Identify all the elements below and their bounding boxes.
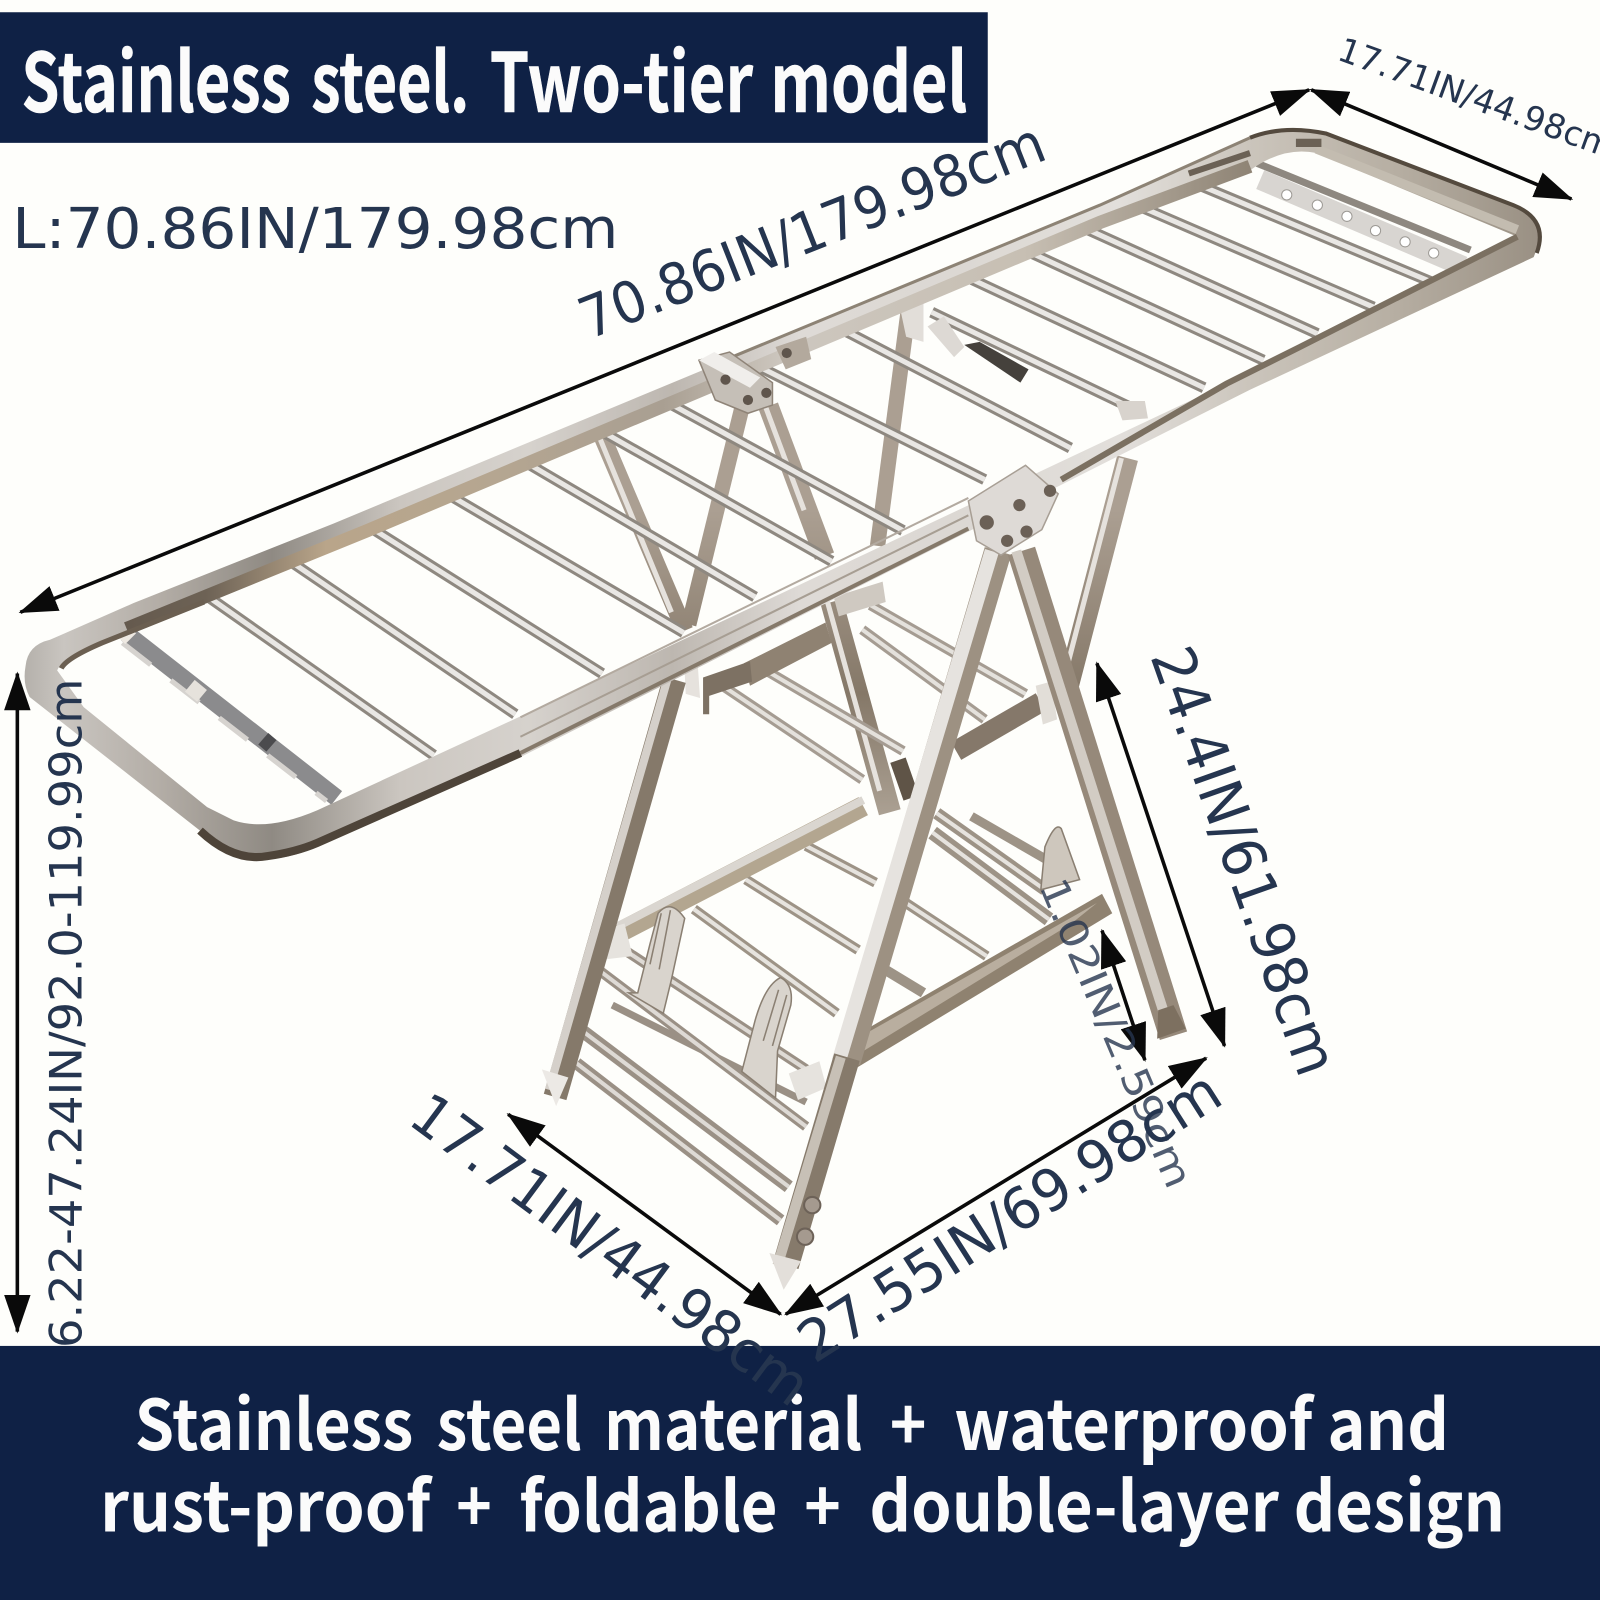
rear left leg [555, 680, 674, 1097]
bottom text line 1: steel [437, 1370, 582, 1470]
bottom text line 2: double-layer design [869, 1452, 1505, 1552]
arrow: height [16, 673, 19, 1332]
label: depth: 17.71IN/44.98cm [398, 1081, 822, 1420]
front left leg lower [786, 1057, 847, 1265]
label: height: 36.22-47.24IN/92.0-119.99cm [40, 679, 93, 1378]
label: small gap: 1.02IN/2.59cm [1030, 872, 1201, 1195]
left slotted end bar [117, 626, 337, 801]
top rungs [204, 179, 1431, 755]
title words [21, 17, 967, 136]
bottom text line 2: foldable [519, 1452, 778, 1552]
bottom banner [0, 1346, 1600, 1600]
right slotted end bar [1257, 163, 1470, 266]
arrow: small gap [1102, 931, 1145, 1060]
label: length on rack: 70.86IN/179.98cm [570, 110, 1054, 353]
rear legs highlights [598, 406, 1121, 791]
lower shelf back rail [611, 806, 863, 937]
bottom text line 2: + [804, 1452, 841, 1552]
dark reflection plate [964, 342, 1029, 383]
drying rack illustration [25, 130, 1540, 1290]
bottom text line 2 [100, 1452, 1505, 1552]
bottom text line 1: Stainless [135, 1370, 413, 1470]
bottom text line 2: + [456, 1452, 492, 1552]
bottom text line 1: + [890, 1370, 927, 1470]
foot pins [797, 1197, 820, 1245]
top title banner [0, 12, 988, 143]
arrow: length [20, 90, 1309, 612]
lower shelf rungs [694, 813, 1051, 1013]
title words: Stainless [21, 17, 291, 136]
upper shelf bracket band [744, 622, 832, 686]
front joint plate with bolts [968, 465, 1058, 555]
top frame [25, 130, 1540, 859]
arrow: base width [786, 1058, 1206, 1314]
title words: Two-tier [490, 17, 753, 136]
bottom text line 2: rust-proof [100, 1452, 434, 1552]
label: overall length heading: L:70.86IN/179.98cm [12, 197, 618, 262]
frame inner band [127, 166, 1250, 629]
arrow: width top [1311, 90, 1571, 199]
title words: steel. [311, 17, 469, 136]
bottom text line 1 [135, 1370, 1449, 1470]
upper shelf rods [719, 605, 1026, 780]
upper shelf side rail [956, 702, 1041, 751]
front right leg [1021, 551, 1173, 1036]
rear joint plate with bolts [699, 337, 811, 413]
upper right bracket [1115, 401, 1148, 420]
arrow: depth [508, 1114, 781, 1314]
front left leg upper [847, 551, 998, 1061]
bottom text line 1: waterproof and [954, 1370, 1449, 1470]
dimension arrows [17, 90, 1571, 1332]
frame dark edges [200, 753, 520, 857]
label: tier height: 24.4IN/61.98cm [1137, 638, 1352, 1084]
lower shelf front rail [854, 894, 1112, 1069]
bottom text line 1: material [604, 1370, 862, 1470]
front rods and ladder [577, 950, 806, 1220]
clips [603, 827, 1080, 1100]
rear legs [601, 311, 1128, 812]
label: base width: 27.55IN/69.98cm [786, 1058, 1233, 1376]
title words: model [770, 17, 967, 136]
arrow: tier height [1097, 663, 1224, 1046]
